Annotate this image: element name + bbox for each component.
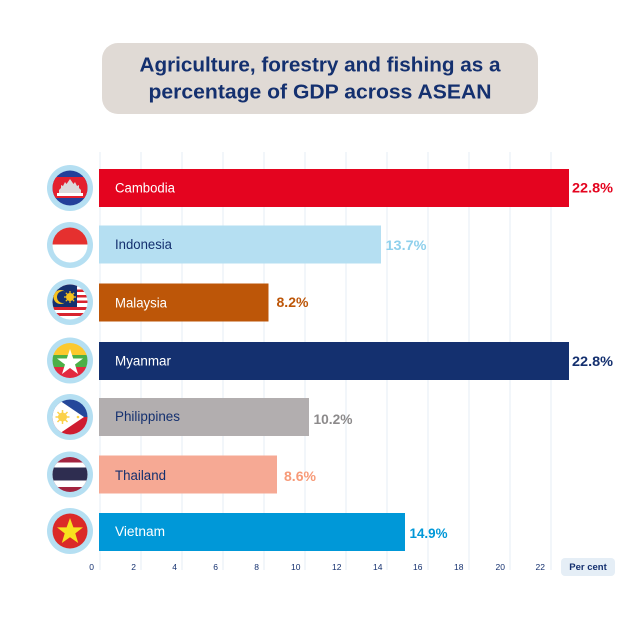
value: Vietnam: 14.9% bbox=[410, 525, 448, 541]
x axis labels bbox=[89, 562, 545, 572]
x axis labels: 10 bbox=[291, 562, 301, 572]
bar: Myanmar: Myanmar bbox=[115, 354, 171, 368]
flag icon: Indonesia bbox=[47, 222, 93, 268]
x axis labels: 20 bbox=[496, 562, 505, 572]
bar: Malaysia bbox=[99, 284, 268, 322]
x axis labels: 18 bbox=[454, 562, 464, 572]
bar: Thailand bbox=[99, 456, 277, 494]
title: Agriculture, forestry and fishing as a bbox=[140, 54, 501, 76]
bar: Vietnam: Vietnam bbox=[115, 524, 165, 539]
axis unit label: Per cent bbox=[569, 562, 608, 573]
value: Indonesia: 13.7% bbox=[386, 237, 427, 253]
flag icon: Cambodia bbox=[47, 165, 93, 211]
x axis labels: 0 bbox=[89, 562, 94, 572]
x axis labels: 16 bbox=[413, 562, 423, 572]
flag icon: Thailand bbox=[47, 452, 93, 498]
bar: Indonesia: Indonesia bbox=[115, 237, 172, 252]
axis unit label bbox=[561, 558, 615, 576]
x axis labels: 2 bbox=[131, 562, 136, 572]
bar: Philippines bbox=[99, 398, 309, 436]
title: percentage of GDP across ASEAN bbox=[148, 80, 492, 104]
bar: Cambodia bbox=[99, 169, 569, 207]
bar: Cambodia: Cambodia bbox=[115, 180, 175, 196]
bar: Vietnam bbox=[99, 513, 405, 551]
bar: Thailand: Thailand bbox=[115, 468, 166, 483]
flag icon: Philippines bbox=[47, 394, 93, 440]
bar: Philippines: Philippines bbox=[115, 409, 180, 424]
x axis labels: 4 bbox=[172, 562, 177, 572]
flag icon: Vietnam bbox=[47, 508, 93, 554]
flag icon: Malaysia bbox=[47, 279, 93, 325]
bar: Indonesia bbox=[99, 226, 381, 264]
flag icon: Myanmar bbox=[47, 338, 93, 384]
title bbox=[102, 43, 538, 114]
bar: Malaysia: Malaysia bbox=[115, 296, 167, 310]
value: Cambodia: 22.8% bbox=[572, 180, 614, 196]
x axis labels: 22 bbox=[536, 562, 545, 572]
value: Philippines: 10.2% bbox=[314, 411, 353, 427]
x axis labels: 6 bbox=[213, 562, 218, 572]
value: Thailand: 8.6% bbox=[284, 468, 317, 484]
bar: Myanmar bbox=[99, 342, 569, 380]
x axis labels: 12 bbox=[332, 562, 342, 572]
x axis labels: 14 bbox=[373, 562, 383, 572]
value: Myanmar: 22.8% bbox=[572, 353, 614, 369]
x axis labels: 8 bbox=[254, 562, 259, 572]
value: Malaysia: 8.2% bbox=[276, 294, 309, 310]
